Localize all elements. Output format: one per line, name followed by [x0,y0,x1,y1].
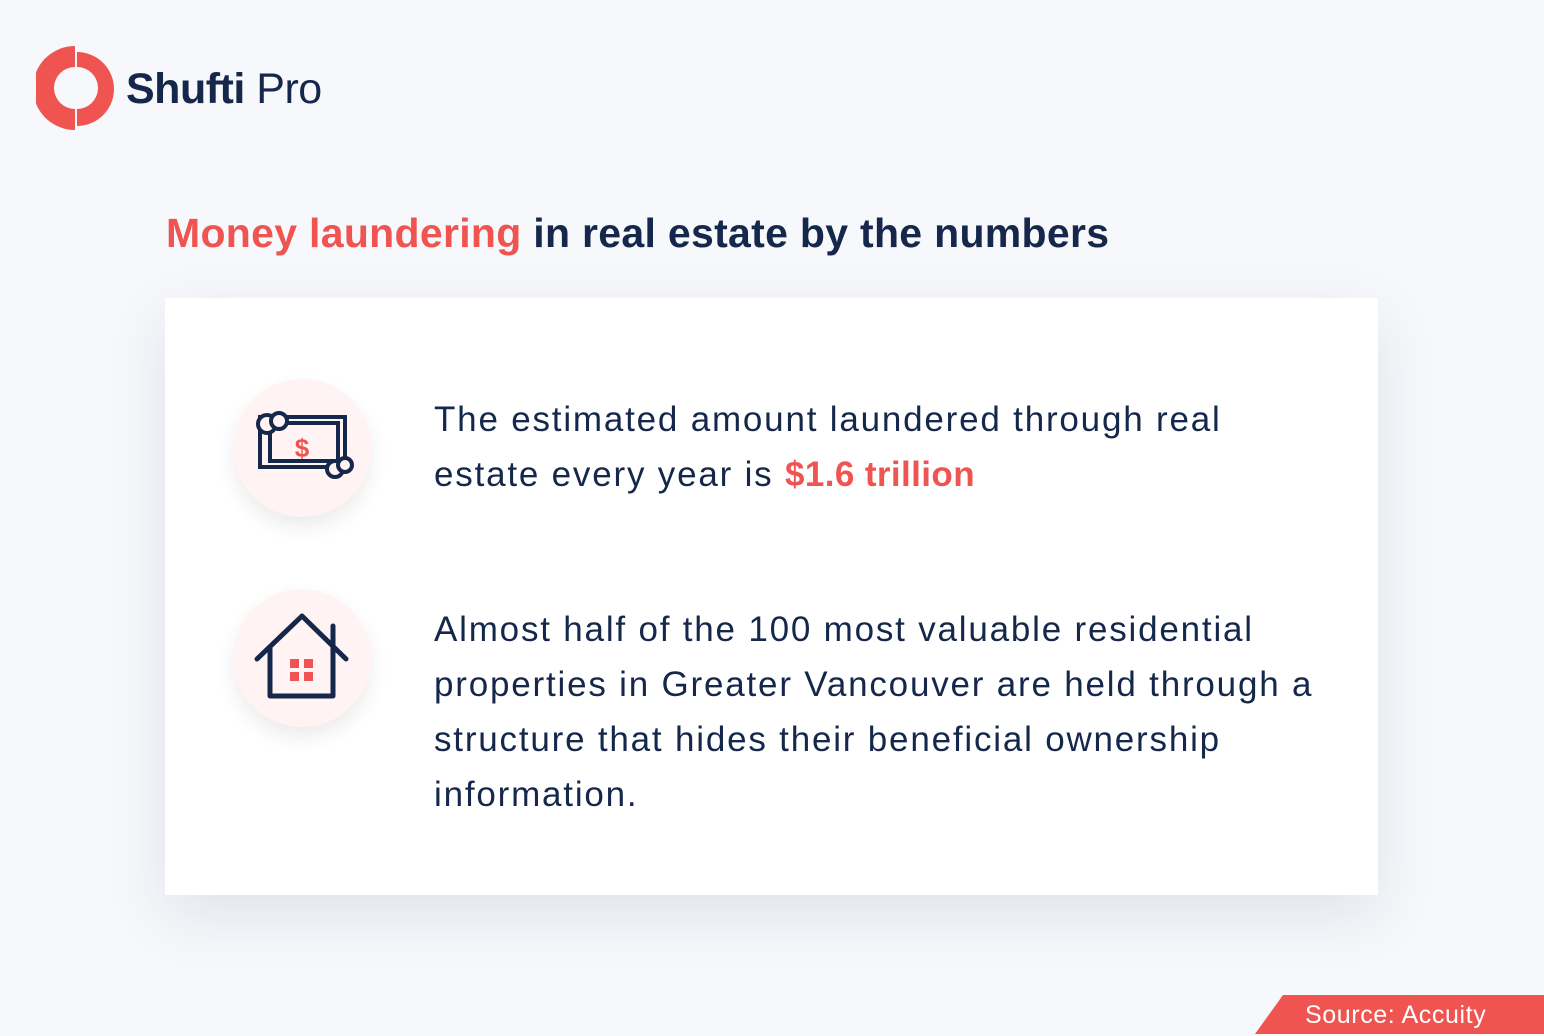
text: stat 2: information. [434,775,638,814]
text: stat 1 [434,400,1222,494]
logo text: Shufti Pro [126,65,322,113]
source badge [1255,995,1544,1034]
icon: money [233,379,371,517]
source badge: Source: Accuity [1305,1001,1486,1029]
icon: money: $ [295,433,310,463]
text: stat 1: estate every year is $1.6 trillion [434,455,975,494]
text: stat 2: properties in Greater Vancouver are held through a [434,665,1313,704]
text: stat 2: structure that hides their beneficial ownership [434,720,1221,759]
icon: logo ring [33,46,114,130]
icon: house [233,589,371,727]
logo [36,46,322,130]
text: stat 2 [434,610,1313,814]
title: Money laundering in real estate by the numbers [166,210,1109,256]
text: stat 1: The estimated amount laundered through real [434,400,1222,439]
panel: stats card [165,298,1378,895]
text: stat 2: Almost half of the 100 most valuable residential [434,610,1254,649]
